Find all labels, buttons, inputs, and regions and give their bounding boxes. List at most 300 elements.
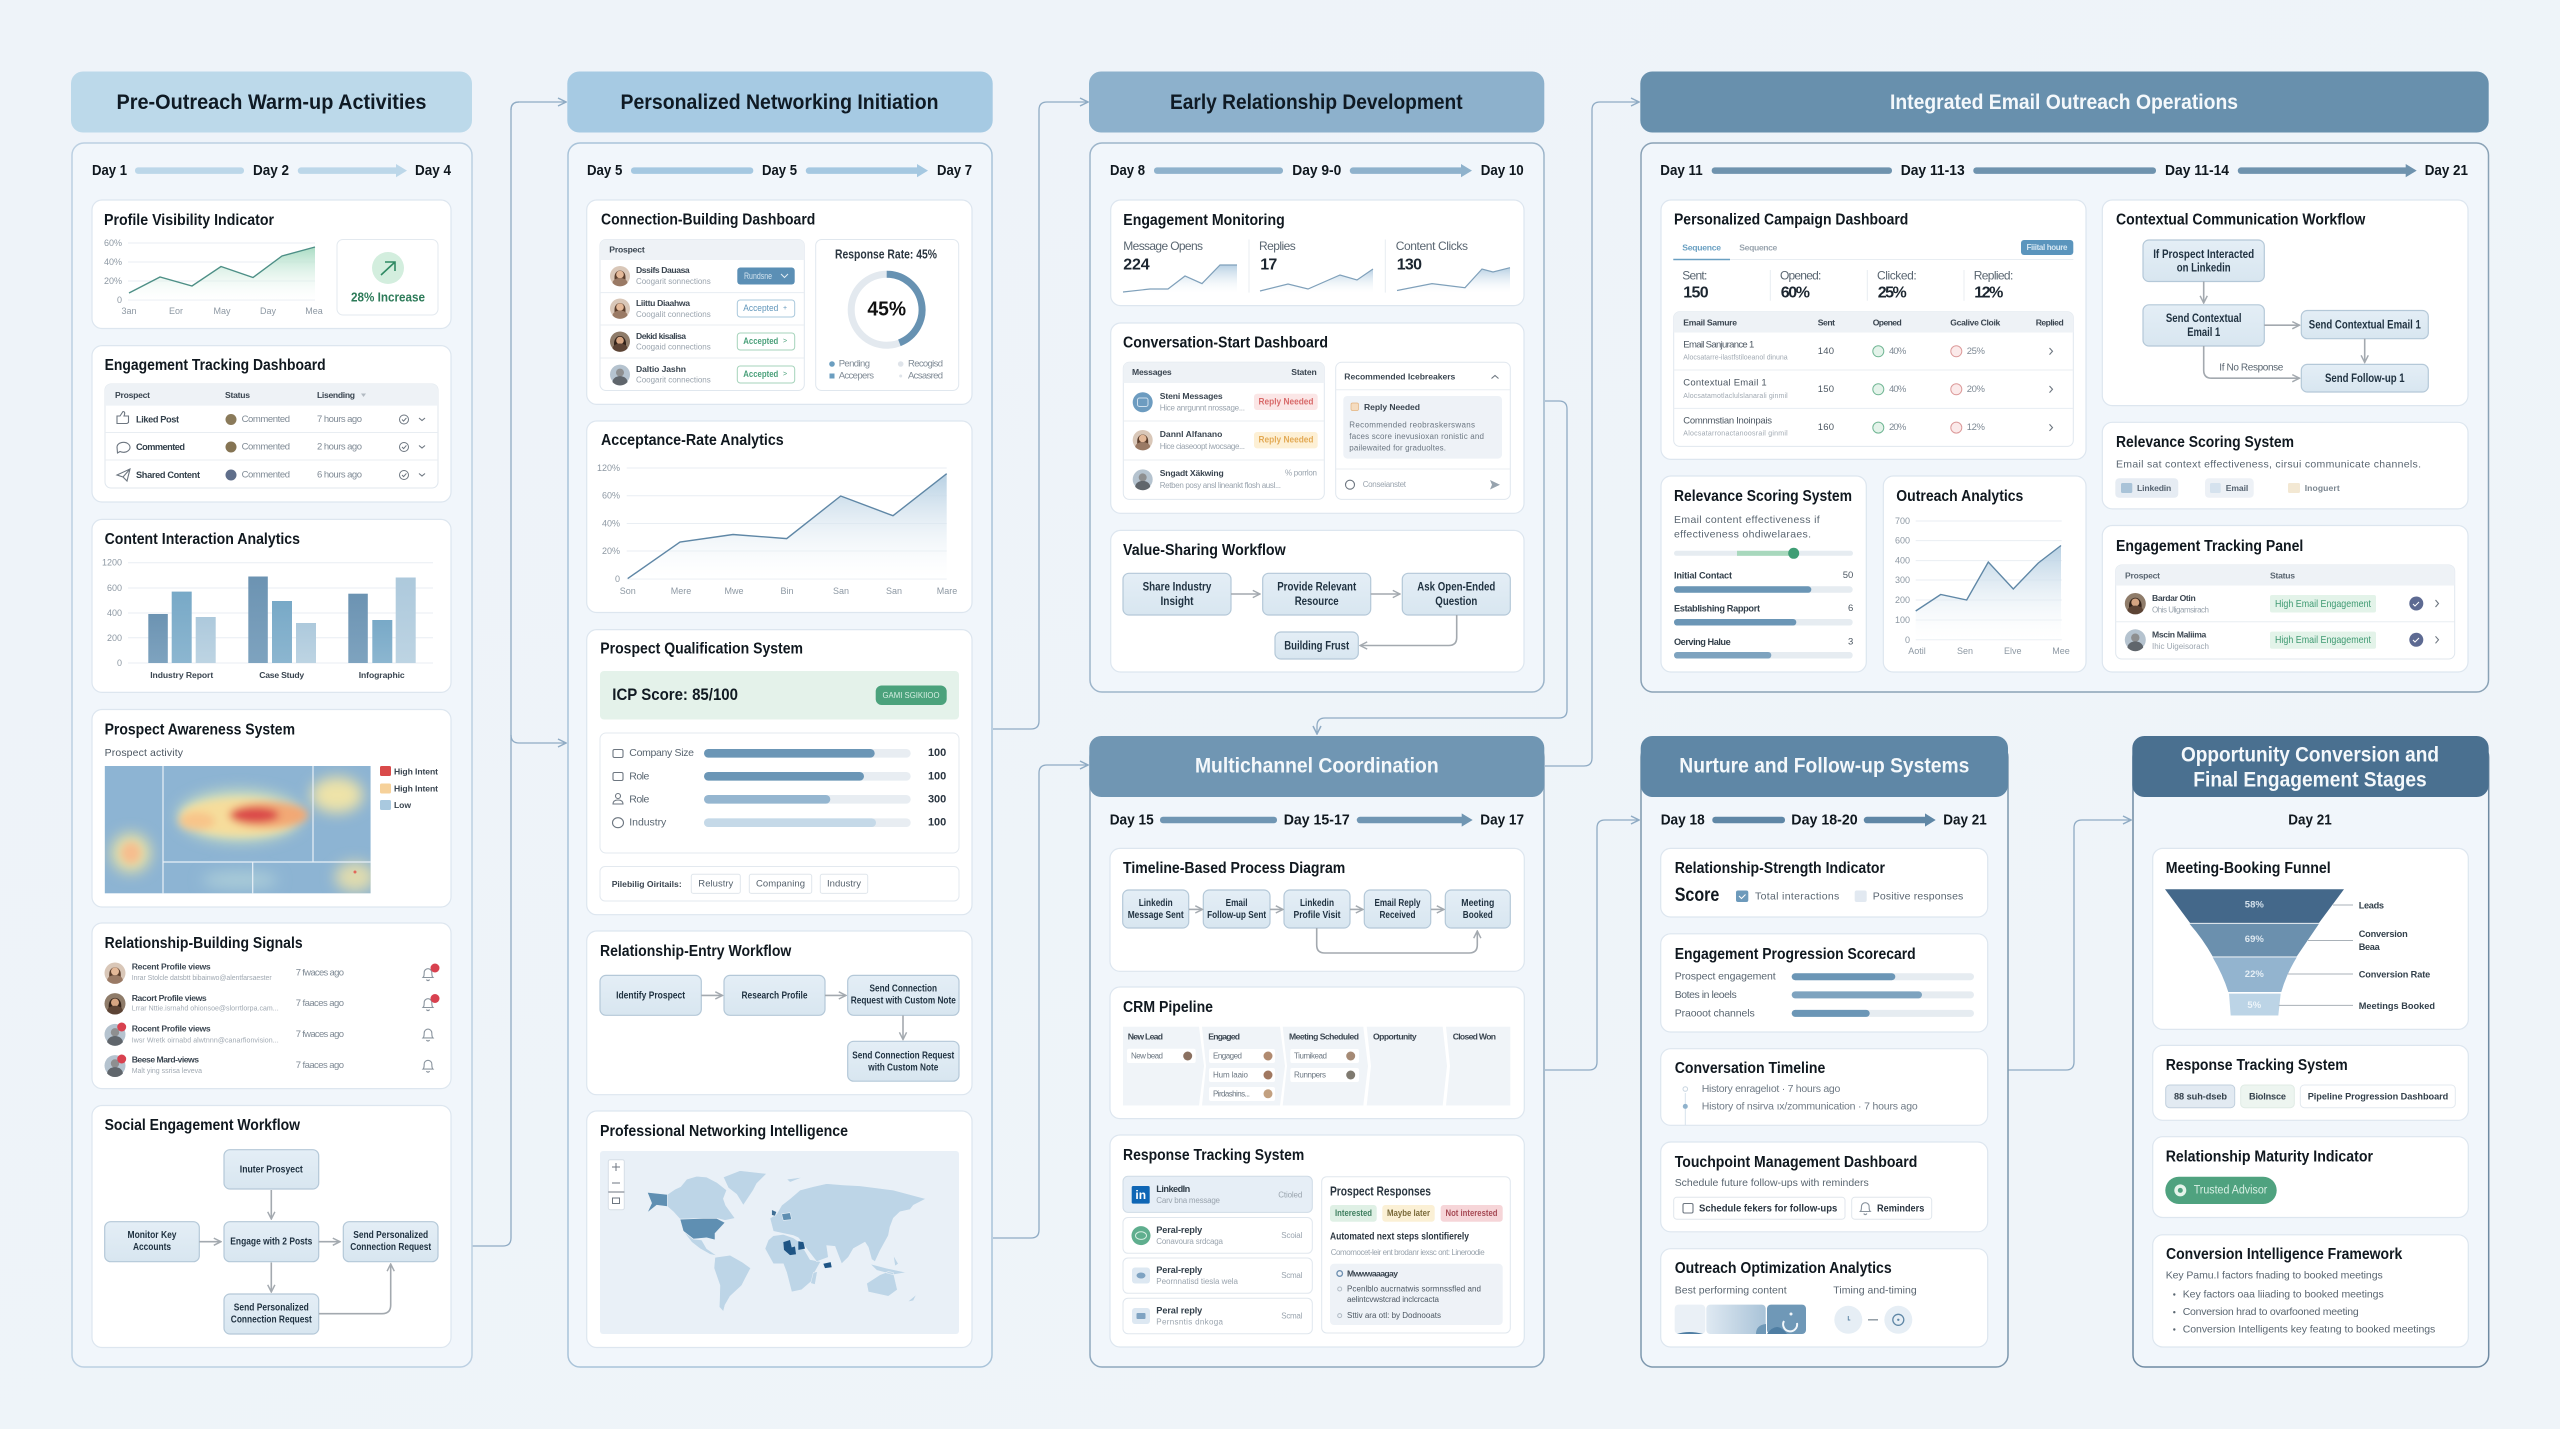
timeline: day 1 to day 4: Day 1 [92,162,127,179]
line chart: acceptance rate: Mere [671,586,691,596]
flow step: Building Frust [1275,632,1358,659]
flow step: Engage with 2 Posts: Engage with 2 Posts [230,1236,312,1248]
card: Response Tracking System: Response Tracking System [1123,1147,1304,1164]
flow arrows [2204,282,2365,378]
table: email sequences: Alocsatarre-ilastfstiloeanol dinuna [1683,354,1788,361]
column: Early Relationship Development [1089,72,1544,692]
timeline: day 1 to day 4: Day 4 [415,162,452,179]
timeline: day 15 to day 17: Day 15 [1110,812,1154,828]
filter chips: Industry [827,878,861,890]
flow step: Research Profile [724,975,825,1015]
heading: Nurture and Follow-up Systems [1641,736,2008,797]
card: Touchpoint Management Dashboard [1661,1142,1988,1232]
signal row 3: Rocent Profile views [132,1024,211,1034]
timeline: day 8 to day 10: Day 8 [1110,162,1145,179]
flow step: If Prospect Interacted on LinkedIn: If Prospect Interacted [2153,247,2254,261]
line chart: outreach: Elve [2004,646,2021,656]
flow step: Send Connection Request with Custom Note [848,975,959,1015]
heading: Personalized Networking Initiation: Personalized Networking Initiation [620,91,938,114]
table: tracking: Prospect [2125,570,2160,580]
funnel chart: Beaa [2359,942,2381,952]
thumbnails: best content [1675,1305,1806,1334]
flow step: Ask Open-Ended Question: Question [1435,594,1477,608]
panel frame [1090,143,1544,692]
score bars: Role [629,770,649,782]
table: prospects: Prospect [609,244,645,254]
card: Outreach Analytics [1883,476,2086,672]
timeline: day 18 to day 21: Day 18-20 [1791,812,1858,828]
card: Engagement Tracking Dashboard [92,346,451,502]
bar chart: content interaction: 200 [107,633,122,643]
panel frame [1090,745,1544,1367]
legend: heatmap: High Intent [394,784,438,794]
pipeline stage: Opportunity: Opportunity [1373,1032,1417,1042]
campaign stats: Opened: [1780,268,1821,282]
process step: LinkedIn Message Sent [1123,890,1189,928]
table: engagement: Commented [242,470,290,480]
table: prospects: Accepted [743,369,778,380]
card: Value-Sharing Workflow: Value-Sharing Workflow [1123,542,1286,559]
card: Relevance Scoring System (left): effectiveness ohdiwelaraes. [1674,528,1811,540]
column: Pre-Outreach Warm-up Activities [71,72,472,1367]
score bars [600,733,959,853]
line chart: acceptance rate: 20% [602,546,620,556]
panel: recommended icebreakers [1336,362,1510,499]
table: email sequences: Alocsatarronactanoosrail ginmil [1683,430,1788,438]
card: Touchpoint Management Dashboard: Touchpoint Management Dashboard [1675,1154,1917,1171]
panel: prospect responses: Maybe later [1387,1208,1430,1219]
channel row: reply 2: Peral-reply [1156,1265,1203,1275]
panel: prospect responses: Prospect Responses [1330,1184,1431,1198]
panel: recommended icebreakers: pailewaited for graduoltes. [1349,444,1446,452]
flow step: Send Follow-up 1 [2301,364,2428,392]
heading: Integrated Email Outreach Operations: Integrated Email Outreach Operations [1890,91,2238,114]
line chart: outreach: 700 [1895,516,1910,526]
donut: response rate 45%: Pending [839,358,870,370]
pipeline stage: Meeting Scheduled [1283,1027,1368,1106]
metric: content clicks: 130 [1397,256,1422,273]
table: prospects [600,240,804,390]
panel: recommended icebreakers: Reply Needed [1364,402,1420,412]
panel: prospect responses: Not interested [1446,1208,1498,1219]
card: Timeline-Based Process Diagram [1110,848,1524,971]
heatmap: prospect activity [105,766,375,893]
card: Personalized Campaign Dashboard: Personalized Campaign Dashboard [1674,212,1908,229]
card: Relationship-Strength Indicator [1661,848,1988,917]
channel row: LinkedIn: Ctioled [1278,1190,1302,1199]
line chart: outreach [1895,516,2070,656]
chip: reminders: Reminders [1877,1202,1924,1214]
connector: warm-up to networking [472,102,566,1246]
table: messages: Steni Messages [1160,391,1223,401]
process step: Email Follow-up Sent [1203,890,1270,928]
table: messages: Reply Needed [1258,396,1314,407]
flow arrows [1231,594,1457,646]
table: messages: Messages [1132,367,1172,377]
table: prospects: Coogalit connections [636,310,711,319]
process step: LinkedIn Profile Visit: Linkedin [1300,897,1334,909]
flow step: Send Personalized Connection Request (bottom): Send Personalized [234,1302,309,1314]
timeline: day 18 to day 21: Day 21 [1943,812,1987,828]
card: Content Interaction Analytics [92,519,451,692]
signal row 3 [104,1022,433,1046]
flow step: Identify Prospect [600,975,701,1015]
table: messages: Staten [1291,367,1317,377]
line chart: outreach: 400 [1895,556,1910,566]
flow step: Inuter Prosyect [224,1150,319,1189]
panel: prospect responses: Sttiv ara otl: by Dodnooats [1347,1311,1441,1320]
flow step: Share Industry Insight [1123,573,1231,615]
pipeline stage: Engaged: Pirdashins... [1213,1089,1250,1098]
column: Multichannel Coordination [1089,736,1544,1367]
card: Conversation Timeline: Conversation Timeline [1675,1060,1825,1077]
signal row 4 [104,1054,433,1077]
pipeline stage: Meeting Scheduled: Meeting Scheduled [1289,1032,1359,1042]
table: engagement: Lisending [317,390,355,400]
card: CRM Pipeline: CRM Pipeline [1123,999,1213,1016]
table: tracking [2116,565,2455,659]
table: messages: Dannl Alfanano [1160,429,1222,439]
card: Relationship-Strength Indicator: Relationship-Strength Indicator [1675,860,1885,877]
table: messages: Retben posy ansl lineankt flosh ausl... [1160,481,1281,490]
process step: LinkedIn Message Sent: Linkedin [1139,897,1173,909]
panel frame [568,143,992,1367]
table: email sequences: Sent [1818,317,1835,327]
pipeline stage: Engaged: Engaged [1208,1032,1240,1042]
signal row 1: 7 fwaces ago [296,968,344,978]
tabs: Fiiital houre [2026,243,2068,252]
flow step: Engage with 2 Posts [224,1222,319,1262]
line chart: outreach: 0 [1905,635,1910,645]
pipeline stage: Engaged [1202,1027,1285,1106]
line chart: acceptance rate: 60% [602,491,620,501]
card: Relationship-Strength Indicator: Score [1675,885,1719,906]
line chart: acceptance rate: 0 [615,574,620,584]
card: Professional Networking Intelligence [587,1111,972,1348]
card: Meeting-Booking Funnel [2153,848,2468,1029]
score bars: Role [629,793,649,805]
badge: Trusted Advisor [2165,1177,2277,1204]
pipeline stage: New Lead: New Lead [1128,1032,1163,1042]
heading: Early Relationship Development [1089,72,1544,132]
card: Profile Visibility Indicator [92,200,451,328]
channel row: reply 3: Peral reply [1156,1306,1203,1316]
table: engagement [105,384,438,488]
card: Outreach Optimization Analytics: Outreach Optimization Analytics [1675,1260,1892,1277]
table: prospects: Coogaid connections [636,342,711,352]
timeline: day 8 to day 10 [1110,162,1524,179]
table: email sequences: 150 [1818,384,1834,395]
channel row: reply 1: Conavoura srdcaga [1156,1237,1224,1246]
flow step: Share Industry Insight: Insight [1160,594,1194,608]
flow step: Identify Prospect: Identify Prospect [616,989,686,1001]
table: prospects: Daltio Jashn [636,364,686,374]
table: prospects: Rundsne [744,271,772,281]
timeline: day 5 to day 7: Day 5 [762,162,797,179]
label: If No Response: If No Response [2219,362,2284,374]
card: Contextual Communication Workflow: Contextual Communication Workflow [2116,212,2366,229]
table: engagement: Prospect [115,390,150,400]
table: email sequences: Contextual Email 1 [1683,378,1767,388]
panel: prospect responses: Pcenlblo aucrnatwis sormnssfled and [1347,1284,1481,1294]
process arrows [1189,909,1477,953]
signal row 2: Lrrar Nttie.isrnahd ohionsoe@slorrtlorpa.cam... [132,1006,279,1012]
process step: LinkedIn Message Sent: Message Sent [1128,909,1184,921]
table: prospects: Dssifs Dauasa [636,265,690,275]
campaign stats: 12% [1974,284,2003,302]
card: Prospect Qualification System [587,630,972,915]
flow step: If Prospect Interacted on LinkedIn [2143,240,2264,282]
pipeline stage: Engaged: Hum laaio [1213,1070,1249,1080]
timeline: day 15 to day 17 [1110,812,1524,828]
slider [1674,548,1853,559]
channel row: reply 3 [1123,1298,1312,1334]
line chart: outreach: Aotil [1908,646,1926,656]
table: messages: Hice anrgunnt nrossage... [1160,404,1245,412]
flow step: Send Connection Request with Custom Note (final): Send Connection Request [852,1050,955,1062]
table: engagement: Commented [136,442,185,452]
score bars: Establishing Rapport [1674,603,1760,613]
line chart: outreach: Sen [1957,646,1973,656]
process step: Email Reply Received: Email Reply [1374,897,1421,909]
campaign stats: 60% [1781,284,1810,302]
table: email sequences: Alocsatamotlaclulslanarali ginmil [1683,393,1788,400]
channel row: LinkedIn: in [1135,1188,1146,1202]
signal row 2: 7 faaces ago [296,998,344,1009]
pipeline stage: Closed Won [1446,1027,1510,1106]
flow step: Send Connection Request with Custom Note (final) [848,1041,959,1081]
card: Relationship-Entry Workflow: Relationship-Entry Workflow [600,943,792,960]
filter chips [600,866,959,901]
table: prospects: Coogarit connections [636,376,711,384]
signal row 4: Malt ying ssrisa leveva [132,1068,202,1075]
process step: Email Follow-up Sent: Follow-up Sent [1207,909,1266,921]
flow step: Send Personalized Connection Request (right): Send Personalized [353,1229,428,1241]
flow step: Monitor Key Accounts: Monitor Key [128,1229,177,1241]
card: Response Tracking System [1110,1135,1524,1347]
heading: Pre-Outreach Warm-up Activities [71,72,472,132]
bullet list: Conversion hrad to ovarfooned meeting [2183,1306,2359,1318]
score bars: 50 [1843,570,1853,581]
table: email sequences: Opened [1873,317,1902,327]
card: Engagement Progression Scorecard: Praooot channels [1675,1007,1755,1019]
flow step: Monitor Key Accounts: Accounts [133,1241,171,1253]
panel: prospect responses: Mwwwaaagay [1347,1268,1398,1278]
timeline: day 11 to day 21: Day 21 [2425,162,2468,179]
campaign stats: Sent: [1682,268,1707,282]
ICP score banner: ICP Score: 85/100 [612,686,738,704]
card: Conversion Intelligence Framework [2153,1235,2468,1347]
timeline: day 21: Day 21 [2288,812,2332,828]
bar chart: content interaction: 400 [107,608,122,618]
pipeline stage: New Lead: New bead [1131,1052,1163,1060]
timeline: day 15 to day 17: Day 17 [1480,812,1524,828]
card: Contextual Communication Workflow [2102,200,2468,406]
score bars: 100 [928,747,946,759]
legend chips: Email [2226,483,2248,493]
flow step: Building Frust: Building Frust [1284,638,1349,652]
card: Engagement Monitoring [1111,200,1524,306]
line chart: acceptance rate: 40% [602,518,620,528]
card: Relevance Scoring System (right): Relevance Scoring System [2116,434,2294,451]
filter chips: Pilebilig Oiritails: [612,879,682,889]
metric: replies [1259,239,1373,293]
card: Prospect Awareness System [92,710,451,907]
table: messages: Hice ciaseoopt iwocsage... [1160,442,1245,451]
card: Relevance Scoring System (right) [2102,422,2468,509]
line chart: outreach: 600 [1895,536,1910,546]
card: Value-Sharing Workflow [1111,530,1524,672]
chip: sub-dash [2166,1085,2235,1108]
flow step: Send Contextual Email 1 (left): Send Contextual [2166,311,2242,325]
card: Touchpoint Management Dashboard: Schedule future follow-ups with reminders [1675,1177,1869,1189]
signal row 2: Racort Profile views [132,993,207,1003]
flow step: Share Industry Insight: Share Industry [1143,580,1212,594]
campaign stats: 25% [1878,284,1907,302]
timeline: day 5 to day 7 [587,162,972,179]
funnel chart [2165,889,2435,1016]
card: Engagement Progression Scorecard: Prospect engagement [1675,971,1776,983]
flow step: If Prospect Interacted on LinkedIn: on Linkedin [2177,261,2231,275]
legend chips: Inoguert [2305,483,2340,493]
bar chart: content interaction [102,558,433,680]
flow step: Ask Open-Ended Question [1402,573,1510,615]
table: email sequences: 12% [1967,422,1986,433]
score bars: Industry [629,817,667,829]
heading: Early Relationship Development: Early Relationship Development [1170,91,1463,114]
line chart: profile visibility: May [213,306,231,316]
heading: Multichannel Coordination: Multichannel Coordination [1195,755,1439,778]
funnel chart: 22% [2245,969,2264,980]
line chart: acceptance rate: Mare [937,586,957,596]
channel row: reply 1: Scoial [1281,1231,1303,1240]
bar chart: content interaction: 0 [117,658,122,668]
table: tracking: Bardar Otin [2152,593,2196,603]
timeline: day 11 to day 21: Day 11-13 [1901,162,1965,179]
line chart: profile visibility: 20% [104,276,122,286]
panel frame [72,143,472,1367]
table: email sequences: Comnmstian Inoinpais [1683,416,1772,426]
table: prospects: > [783,371,787,378]
line chart: profile visibility: 40% [104,257,122,267]
card: Relevance Scoring System (left): Relevance Scoring System [1674,488,1852,505]
card: Connection-Building Dashboard [587,200,972,404]
card: Prospect Qualification System: Prospect Qualification System [600,640,803,657]
bullet list [2173,1288,2435,1336]
score bars [1674,570,1853,658]
signal row 1: Recent Profile views [132,962,211,972]
pipeline stage: Meeting Scheduled: Runnpers [1294,1070,1326,1080]
chip: balance [2241,1085,2294,1108]
line chart: outreach: 200 [1895,595,1910,605]
line chart: acceptance rate: Bin [780,586,794,596]
panel frame [2133,745,2489,1367]
process step: Meeting Booked: Meeting [1461,897,1494,909]
card: Engagement Tracking Dashboard: Engagement Tracking Dashboard [105,357,326,374]
chip: pipeline progression dashboard: Pipeline Progression Dashboard [2308,1091,2448,1101]
line chart: acceptance rate: Mwe [724,586,744,596]
table: prospects: Accepted [743,336,778,347]
card: Social Engagement Workflow: Social Engagement Workflow [105,1117,300,1134]
filter chips: Companing [756,878,805,890]
callout: 28% increase: 28% Increase [351,290,425,304]
score bars: 300 [928,793,946,805]
pipeline stage: Closed Won: Closed Won [1453,1032,1496,1042]
table: tracking: High Email Engagement [2275,598,2371,610]
panel: recommended icebreakers: faces score inevusioxan ronistic and [1349,432,1484,441]
bar chart: content interaction: 600 [107,583,122,593]
card: Engagement Progression Scorecard: Engagement Progression Scorecard [1675,946,1916,963]
card: Engagement Progression Scorecard: Botes in leoels [1675,989,1737,1001]
connector: multichannel to nurture [1545,820,1639,1070]
campaign stats: Replied: [1974,268,2013,282]
card: Outreach Optimization Analytics: Timing and-timing [1833,1285,1917,1297]
donut: response rate 45%: Accepers [839,370,874,382]
pipeline stage: Engaged: Engaged [1213,1052,1242,1060]
panel: prospect responses: Interested [1335,1208,1372,1219]
table: email sequences: Email Sanjurance 1 [1683,339,1754,350]
checkbox: positive responses: Positive responses [1873,890,1963,902]
campaign stats: Clicked: [1877,268,1917,282]
card: CRM Pipeline [1110,987,1524,1119]
funnel chart: Conversion [2359,929,2408,939]
metric: replies: 17 [1260,256,1277,273]
funnel chart: 5% [2247,1000,2262,1011]
process step: Meeting Booked: Booked [1463,909,1493,921]
panel frame [1641,143,2488,692]
legend: heatmap [380,766,438,810]
table: tracking: High Email Engagement [2275,634,2371,646]
line chart: acceptance rate: Son [620,586,636,596]
card: Conversation Timeline: History enragelıot · 7 hours ago [1702,1083,1840,1095]
connector: multichannel to email operations [1545,102,1639,766]
card: Conversion Intelligence Framework: Conversion Intelligence Framework [2166,1246,2402,1263]
timeline: day 11 to day 21 [1660,162,2468,179]
card: Prospect Awareness System: Prospect activity [105,747,184,759]
table: email sequences: 160 [1818,422,1834,433]
table: email sequences: Email Samure [1683,317,1737,327]
metric: replies: Replies [1259,239,1296,253]
table: engagement: Liked Post [136,414,179,424]
table: prospects: Liittu Diaahwa [636,298,690,308]
process step: Meeting Booked [1445,890,1510,928]
line chart: profile visibility: Mea [305,306,323,316]
pipeline stage: Meeting Scheduled: Tiumikead [1294,1052,1327,1060]
process step: LinkedIn Profile Visit [1284,890,1350,928]
flow step: Send Connection Request with Custom Note: Send Connection [870,982,937,994]
tabs: Sequence [1739,242,1778,252]
table: email sequences: Replied [2036,317,2064,327]
heading: Opportunity Conversion and Final Engagement Stages [2132,736,2489,797]
campaign stats: 150 [1683,284,1709,302]
signal row 1 [104,962,440,984]
heading: Pre-Outreach Warm-up Activities: Pre-Outreach Warm-up Activities [116,91,426,114]
chip: schedule [1674,1197,1845,1219]
panel: recommended icebreakers: Recommended Icebreakers [1344,372,1456,382]
card: Acceptance-Rate Analytics [587,421,972,612]
timeline: day 18 to day 21: Day 18 [1661,812,1705,828]
line chart: acceptance rate [597,463,957,596]
channel row: reply 2: Scmal [1281,1271,1303,1280]
timeline: day 15 to day 17: Day 15-17 [1284,812,1350,828]
legend: heatmap: High Intent [394,766,438,776]
channel row: reply 1 [1123,1218,1312,1253]
metric: content clicks: Content Clicks [1396,239,1468,253]
connector: networking to relationship development [993,102,1088,1238]
table: prospects: + [783,305,787,312]
flow step: Send Follow-up 1: Send Follow-up 1 [2325,371,2405,385]
card: Acceptance-Rate Analytics: Acceptance-Rate Analytics [601,432,784,449]
